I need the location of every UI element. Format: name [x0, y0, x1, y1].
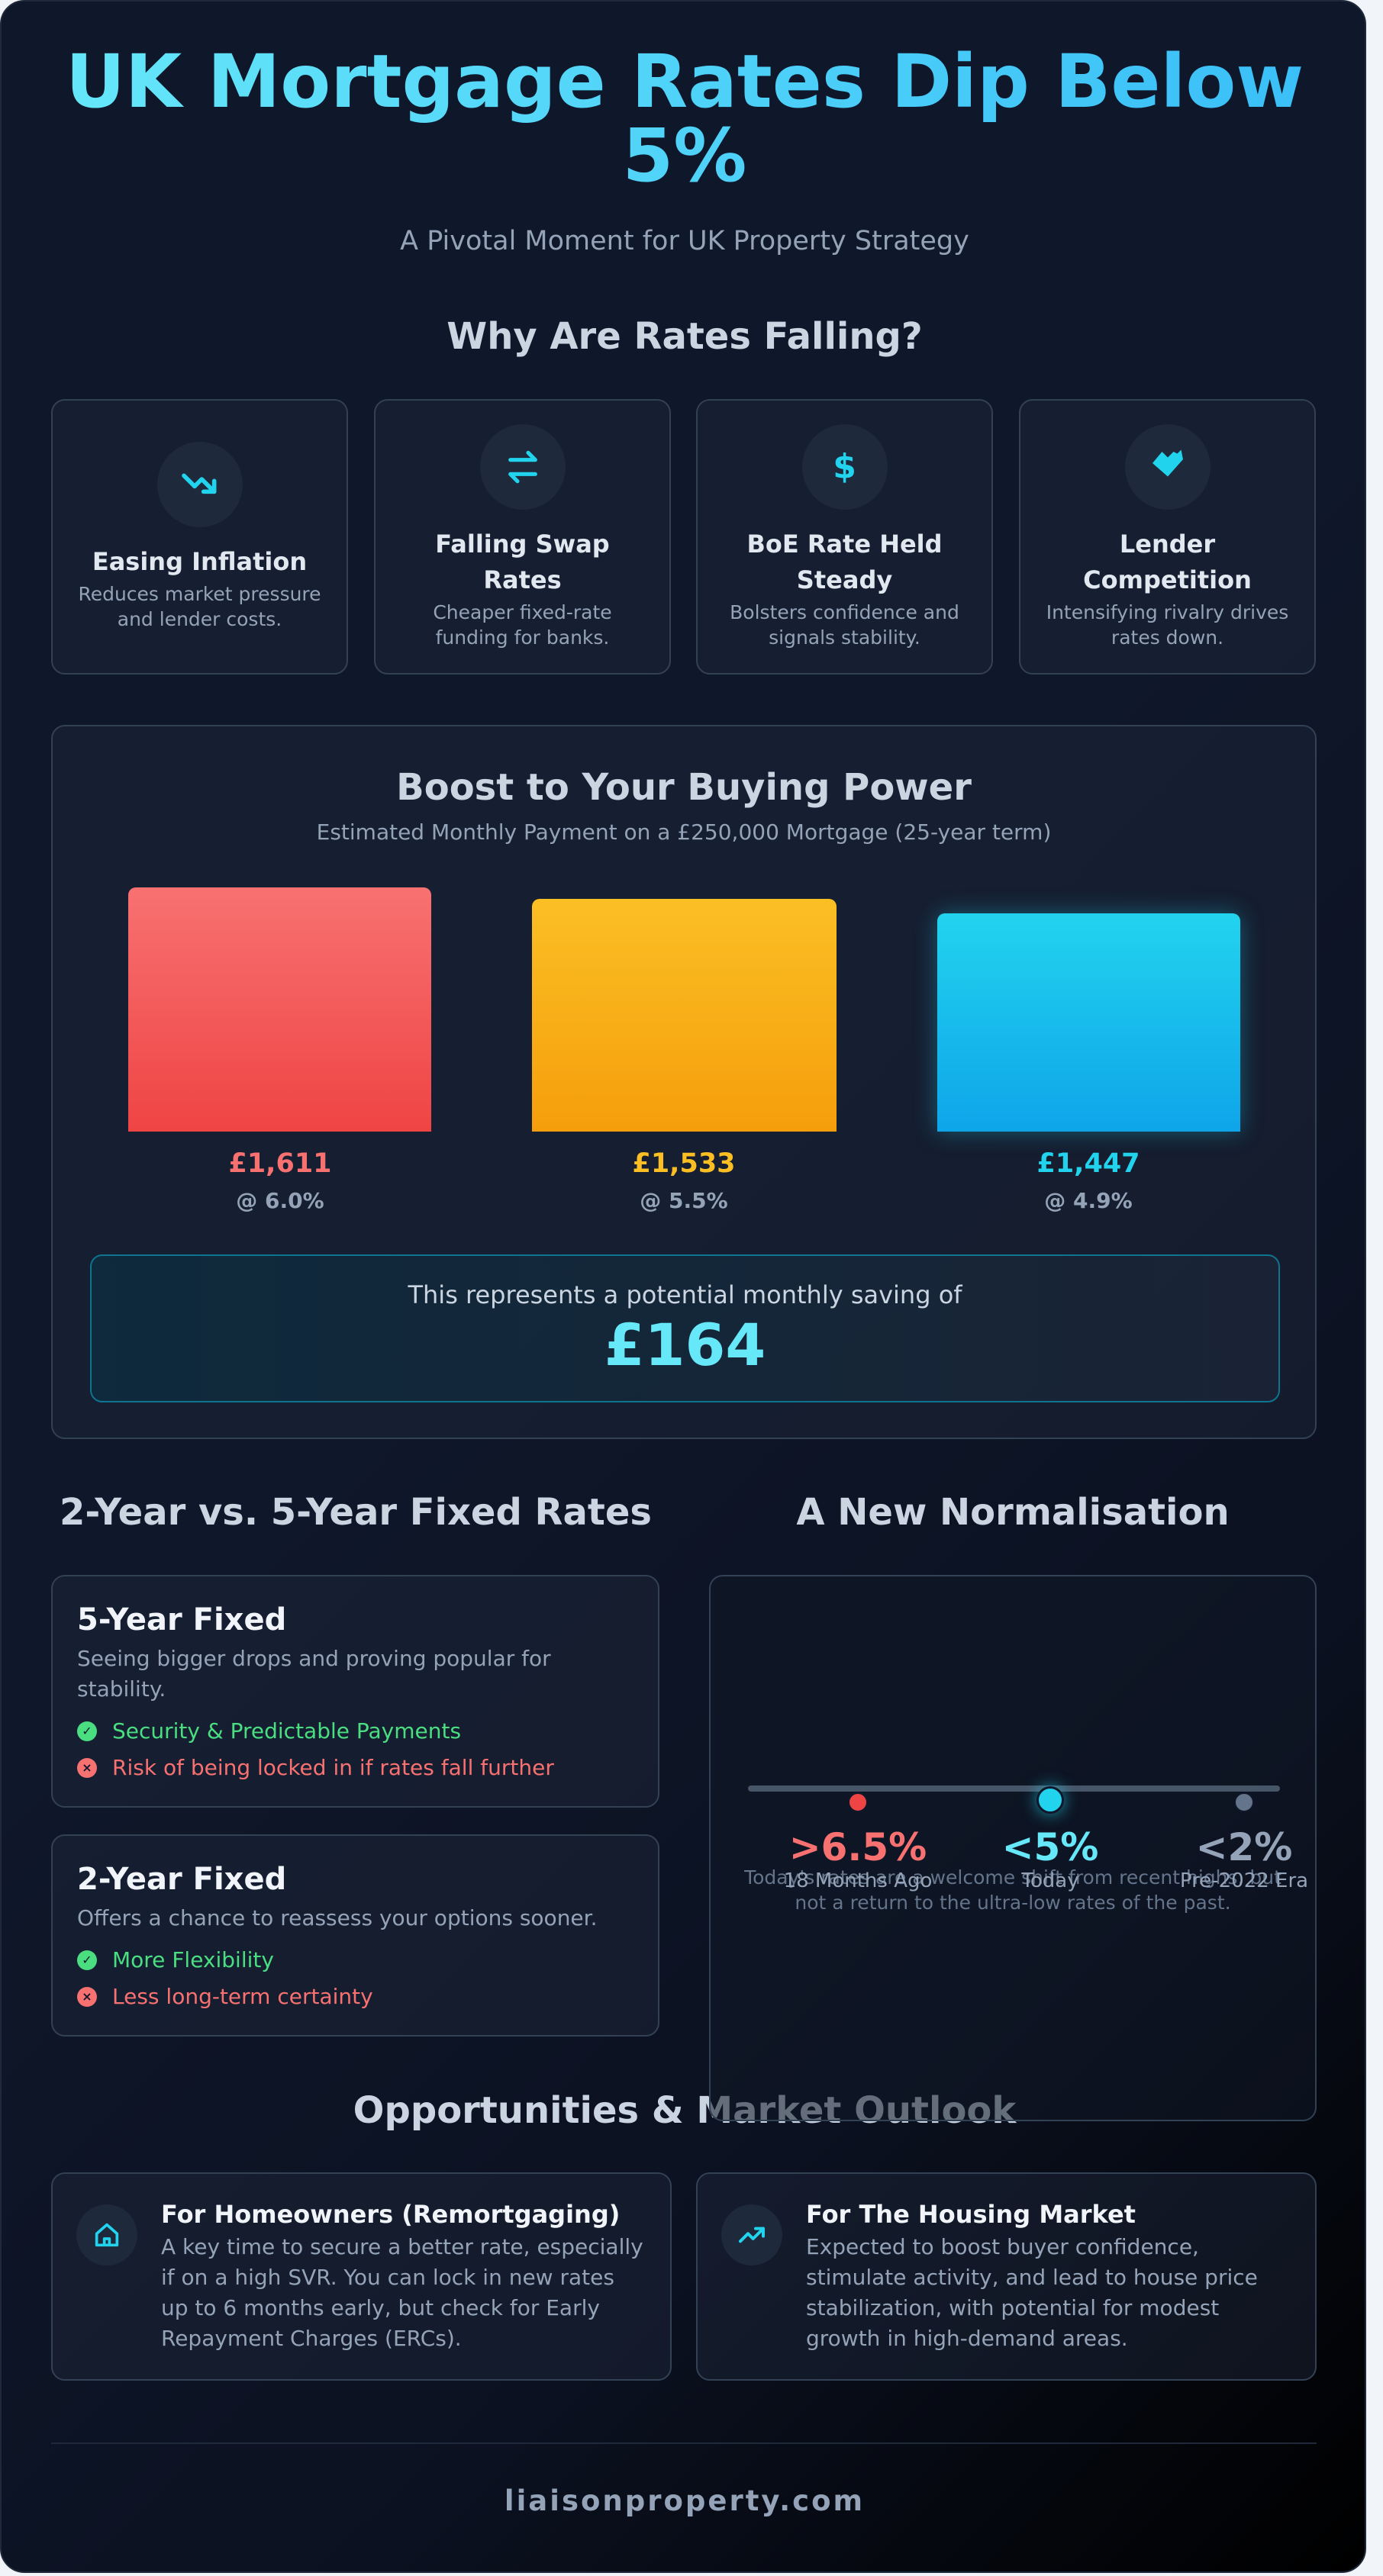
- heading: 2-year vs 5-year: 2-Year vs. 5-Year Fixed Rates: [60, 1491, 652, 1534]
- icon: trending down: [157, 442, 243, 527]
- card: 2-year fixed: More Flexibility: [112, 1947, 274, 1972]
- dot: 18 months ago: [848, 1792, 868, 1812]
- card: 5-year fixed: [51, 1575, 659, 1808]
- title: UK Mortgage Rates Dip Below: [66, 39, 1304, 124]
- card: 5-year fixed: Risk of being locked in if rates fall further: [112, 1755, 554, 1780]
- card: homeowners: [51, 2172, 672, 2381]
- title: [2, 45, 1368, 193]
- bar: 5.5%: [532, 899, 837, 1132]
- card: 2-year fixed: 2-Year Fixed: [77, 1862, 286, 1897]
- icon: dollar: [801, 424, 887, 510]
- card: housing market: [696, 2172, 1317, 2381]
- card: housing market: stimulate activity, and lead to house price: [806, 2265, 1258, 2290]
- panel: buying power: £1,533: [632, 1148, 736, 1179]
- card: 5-year fixed: Seeing bigger drops and proving popular for stability.: [77, 1646, 551, 1702]
- card: homeowners: A key time to secure a better rate, especially: [161, 2234, 643, 2259]
- stat: today: <5%: [1002, 1825, 1098, 1869]
- card: lender competition: [1019, 399, 1316, 675]
- icon: dollar: $: [833, 447, 856, 486]
- card: housing market: stabilization, with potential for modest: [806, 2295, 1219, 2320]
- panel: buying power: @ 6.0%: [236, 1188, 324, 1213]
- card: 5-year fixed: ✓: [82, 1724, 92, 1738]
- panel: buying power: [51, 725, 1317, 1439]
- card: homeowners: up to 6 months early, but check for Early: [161, 2295, 600, 2320]
- stat: 18 months ago: >6.5%: [789, 1825, 927, 1869]
- heading: a new normalisation: A New Normalisation: [796, 1491, 1230, 1534]
- card: easing inflation: [51, 399, 348, 675]
- callout: saving: This represents a potential monthly saving of: [408, 1280, 962, 1309]
- card: falling swap rates: Falling Swap Rates: [435, 530, 610, 594]
- card: homeowners: if on a high SVR. You can lock in new rates: [161, 2265, 614, 2290]
- card: easing inflation: Reduces market pressure and lender costs.: [78, 583, 321, 630]
- caption: not a return to the ultra-low rates of the past.: [795, 1892, 1231, 1914]
- bar: 6.0%: [128, 887, 431, 1132]
- dot: pre-2022: [1234, 1792, 1254, 1812]
- stat: today: Today: [1021, 1869, 1079, 1892]
- callout: saving: [90, 1254, 1280, 1402]
- divider: [51, 2442, 1317, 2444]
- stat: today: [1002, 1825, 1098, 1892]
- card: homeowners: Repayment Charges (ERCs).: [161, 2326, 462, 2351]
- card: falling swap rates: [374, 399, 671, 675]
- stat: 18 months ago: [784, 1825, 932, 1892]
- panel: normalisation timeline: [709, 1575, 1317, 2121]
- icon: house: [76, 2204, 137, 2265]
- card: boe rate: BoE Rate Held Steady: [746, 530, 943, 594]
- panel: buying power: @ 5.5%: [640, 1188, 728, 1213]
- card: easing inflation: Easing Inflation: [92, 547, 307, 576]
- dot: today: [1036, 1786, 1064, 1814]
- bar: 4.9%: [937, 913, 1240, 1132]
- callout: saving: £164: [604, 1311, 766, 1379]
- icon: swap arrows: [479, 424, 565, 510]
- stat: pre-2022: [1180, 1825, 1308, 1892]
- card: 5-year fixed: 5-Year Fixed: [77, 1602, 286, 1637]
- value labels: £1,611: [228, 1148, 332, 1179]
- card: lender competition: Intensifying rivalry drives rates down.: [1046, 601, 1288, 649]
- card: 2-year fixed: Less long-term certainty: [112, 1984, 373, 2009]
- card: 5-year fixed: Security & Predictable Payments: [112, 1718, 461, 1744]
- card: 2-year fixed: ✓: [82, 1953, 92, 1967]
- panel: buying power: @ 4.9%: [1044, 1188, 1133, 1213]
- card: boe rate: [696, 399, 993, 675]
- subtitle: A Pivotal Moment for UK Property Strategy: [400, 226, 969, 256]
- stat: pre-2022: Pre-2022 Era: [1180, 1869, 1308, 1892]
- card: housing market: Expected to boost buyer confidence,: [806, 2234, 1199, 2259]
- title: 5%: [623, 113, 746, 198]
- footer: liaisonproperty.com: [505, 2484, 865, 2517]
- heading: opportunities: Opportunities & Market Outlook: [353, 2089, 1016, 2132]
- card: 2-year fixed: ×: [82, 1989, 92, 2004]
- card: lender competition: Lender Competition: [1083, 530, 1252, 594]
- card: 2-year fixed: Offers a chance to reassess your options sooner.: [77, 1905, 598, 1930]
- card: 2-year fixed: [51, 1834, 659, 2037]
- card: falling swap rates: Cheaper fixed-rate funding for banks.: [433, 601, 612, 649]
- card: boe rate: Bolsters confidence and signals stability.: [730, 601, 959, 649]
- heading: Boost to Your Buying Power: [396, 766, 972, 809]
- stat: pre-2022: <2%: [1196, 1825, 1292, 1869]
- card: homeowners: For Homeowners (Remortgaging): [161, 2200, 620, 2229]
- card: 5-year fixed: ×: [82, 1760, 92, 1775]
- heading: why are rates falling: Why Are Rates Falling?: [446, 315, 923, 358]
- caption: [744, 1866, 1281, 1914]
- card: housing market: growth in high-demand areas.: [806, 2326, 1128, 2351]
- stat: 18 months ago: 18 Months Ago: [784, 1869, 932, 1892]
- subheading: Estimated Monthly Payment on a £250,000 Mortgage (25-year term): [317, 819, 1051, 845]
- timeline line: [748, 1785, 1280, 1792]
- icon: handshake: [1125, 424, 1211, 510]
- icon: trending up: [721, 2204, 782, 2265]
- card: housing market: For The Housing Market: [806, 2200, 1136, 2229]
- panel: buying power: £1,447: [1036, 1148, 1140, 1179]
- caption: Today's rates are a welcome shift from recent highs, but: [744, 1866, 1281, 1889]
